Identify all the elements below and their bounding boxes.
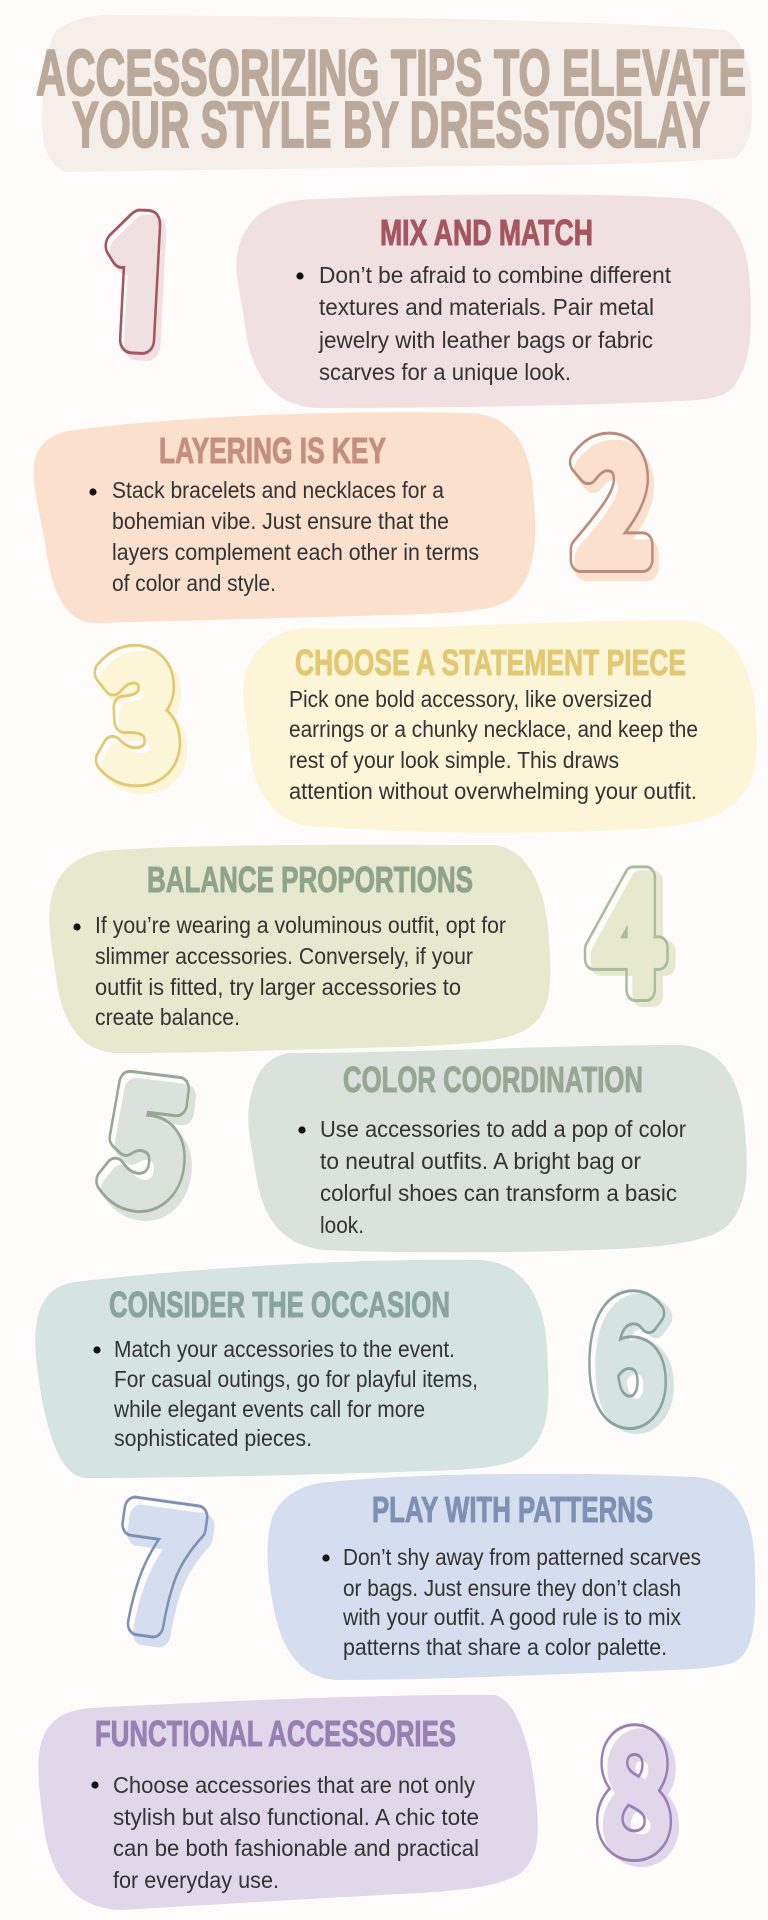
- text block: tip 3: [289, 686, 698, 804]
- icon: number 4: 4: [598, 811, 670, 1041]
- text block: tip 5: colorful shoes can transform a basic: [320, 1180, 677, 1206]
- text block: tip 7: patterns that share a color palette.: [343, 1634, 667, 1660]
- icon: number 6: 6: [598, 1236, 670, 1466]
- text block: tip 1: [296, 262, 672, 385]
- icon: number 3: 3: [99, 595, 188, 827]
- text block: tip 7: or bags. Just ensure they don’t clash: [343, 1575, 681, 1601]
- text block: tip 6: For casual outings, go for playful items,: [114, 1366, 478, 1392]
- panel: tip 4 balance proportions: [49, 845, 550, 1053]
- text block: tip 2: of color and style.: [112, 570, 276, 596]
- heading: mix and match: MIX AND MATCH: [380, 212, 593, 253]
- heading: color coordination: COLOR COORDINATION: [343, 1059, 643, 1100]
- panel: tip 8 functional accessories: [38, 1695, 538, 1910]
- text block: tip 2: [89, 477, 479, 596]
- text block: tip 2: bohemian vibe. Just ensure that the: [112, 508, 449, 534]
- panel: tip 1 mix and match: [236, 194, 751, 408]
- text block: tip 5: Use accessories to add a pop of color: [320, 1116, 686, 1142]
- icon: number 6: 6: [591, 1232, 663, 1462]
- text block: tip 5: to neutral outfits. A bright bag or: [320, 1148, 641, 1174]
- icon: number 4: [584, 865, 676, 1007]
- text block: tip 8: stylish but also functional. A chic tote: [113, 1804, 479, 1830]
- title: [36, 36, 746, 161]
- text block: tip 3: attention without overwhelming your outfit.: [289, 778, 697, 804]
- text block: tip 4: slimmer accessories. Conversely, if your: [95, 943, 473, 969]
- text block: tip 4: If you’re wearing a voluminous outfit, opt for: [95, 912, 506, 938]
- text block: tip 8: Choose accessories that are not only: [113, 1772, 475, 1798]
- icon: number 4: 4: [591, 806, 663, 1036]
- text block: tip 7: with your outfit. A good rule is to mix: [342, 1604, 681, 1630]
- heading: layering is key: LAYERING IS KEY: [159, 430, 386, 471]
- text block: tip 5: [298, 1116, 686, 1238]
- heading: functional accessories: FUNCTIONAL ACCESSORIES: [95, 1713, 456, 1754]
- text block: tip 6: [93, 1336, 478, 1451]
- icon: number 3: [94, 644, 188, 794]
- text block: tip 8: for everyday use.: [113, 1867, 279, 1893]
- icon: number 6: [588, 1289, 674, 1434]
- panel: tip 5 color coordination: [248, 1045, 747, 1252]
- text block: tip 1: textures and materials. Pair metal: [319, 294, 654, 320]
- text block: tip 4: [73, 912, 506, 1030]
- icon: number 1: 1: [92, 207, 182, 367]
- panel: tip 2 layering is key: [34, 412, 535, 623]
- text block: tip 6: Match your accessories to the event.: [114, 1336, 455, 1362]
- text block: tip 4: outfit is fitted, try larger accessories to: [95, 974, 461, 1000]
- icon: number 7: 7: [106, 1439, 213, 1676]
- icon: number 7: [121, 1496, 214, 1648]
- icon: number 8: 8: [606, 1672, 676, 1900]
- title panel: [36, 15, 752, 172]
- text block: tip 7: Don’t shy away from patterned scarves: [343, 1544, 701, 1570]
- text block: tip 5: look.: [320, 1212, 364, 1238]
- icon: number 5: 5: [101, 1021, 205, 1257]
- panel: tip 6 consider the occasion: [35, 1260, 549, 1478]
- panel: tip 7 play with patterns: [268, 1474, 755, 1680]
- text block: tip 4: create balance.: [95, 1004, 240, 1030]
- icon: number 2: [568, 432, 659, 581]
- icon: number 2: 2: [575, 377, 649, 606]
- text block: tip 8: [91, 1772, 479, 1893]
- text block: tip 1: scarves for a unique look.: [319, 359, 571, 385]
- icon: number 8: 8: [599, 1667, 669, 1895]
- icon: number 3: 3: [93, 588, 182, 820]
- text block: tip 2: Stack bracelets and necklaces for a: [112, 477, 444, 503]
- text block: tip 3: rest of your look simple. This draws: [289, 747, 619, 773]
- text block: tip 2: layers complement each other in terms: [112, 539, 479, 565]
- icon: number 5: [95, 1070, 196, 1221]
- icon: number 5: 5: [95, 1013, 199, 1249]
- icon: number 7: 7: [112, 1448, 219, 1685]
- heading: play with patterns: PLAY WITH PATTERNS: [372, 1489, 653, 1530]
- text block: tip 1: jewelry with leather bags or fabric: [318, 327, 653, 353]
- text block: tip 8: can be both fashionable and practical: [113, 1835, 479, 1861]
- panel: tip 3 statement piece: [243, 620, 757, 833]
- text block: tip 7: [322, 1544, 701, 1660]
- icon: number 1: [104, 208, 166, 361]
- text block: tip 3: earrings or a chunky necklace, and keep the: [289, 716, 698, 742]
- text block: tip 6: sophisticated pieces.: [114, 1425, 312, 1451]
- icon: number 8: [596, 1723, 679, 1867]
- icon: number 2: 2: [580, 385, 654, 614]
- icon: number 1: 1: [97, 213, 187, 373]
- heading: consider the occasion: CONSIDER THE OCCASION: [109, 1284, 450, 1325]
- text block: tip 1: Don’t be afraid to combine different: [319, 262, 672, 288]
- heading: balance proportions: BALANCE PROPORTIONS: [147, 859, 473, 900]
- text block: tip 3: Pick one bold accessory, like oversized: [289, 686, 652, 712]
- text block: tip 6: while elegant events call for more: [113, 1396, 425, 1422]
